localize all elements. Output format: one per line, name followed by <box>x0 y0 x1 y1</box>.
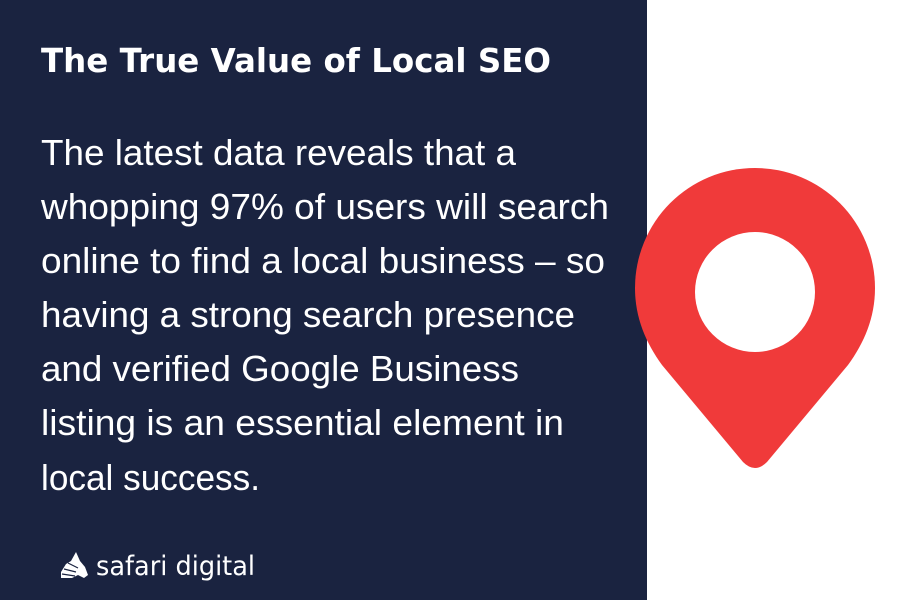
body text block <box>40 132 609 498</box>
body text block: listing is an essential element in <box>41 402 564 443</box>
icon: zebra head <box>61 552 88 578</box>
brand name: safari digital <box>96 551 255 582</box>
panel: navy text background <box>0 0 647 600</box>
body text block: whopping 97% of users will search <box>40 186 609 227</box>
body text block: having a strong search presence <box>41 294 575 335</box>
body text block: and verified Google Business <box>41 348 519 389</box>
body text block: local success. <box>41 457 260 498</box>
logo: safari digital <box>61 551 255 582</box>
body text block: online to find a local business – so <box>41 240 605 281</box>
body text block: The latest data reveals that a <box>41 132 517 173</box>
icon: red map pin <box>635 168 875 468</box>
title: The True Value of Local SEO <box>41 41 551 80</box>
